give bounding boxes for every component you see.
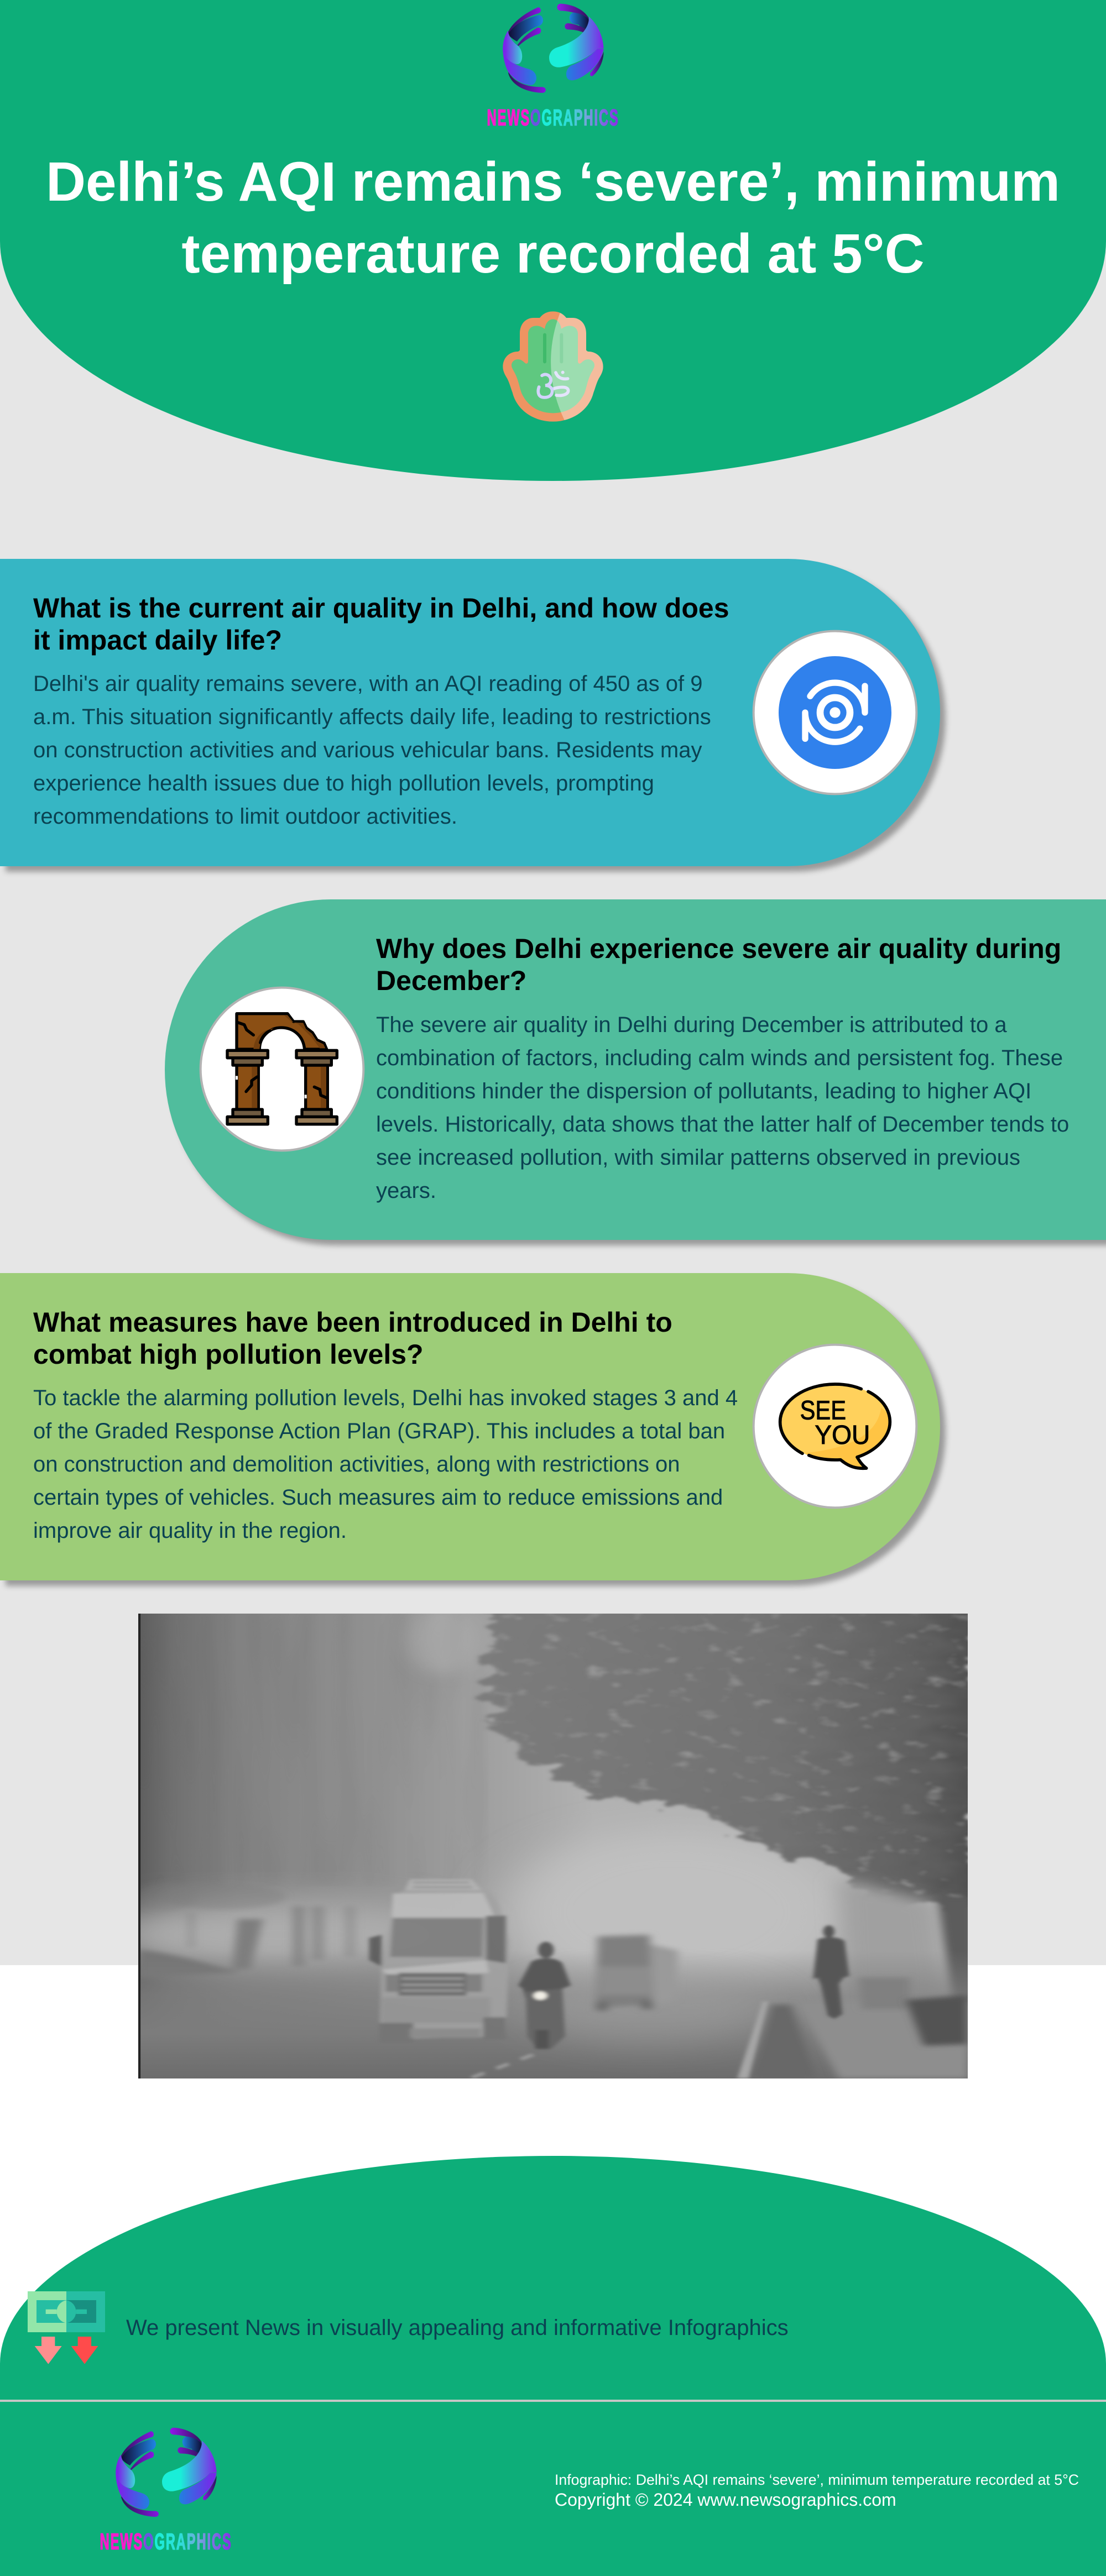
motorcyclist — [518, 1942, 571, 2049]
footer logo wordmark: NEWSOGRAPHICS — [100, 2530, 231, 2554]
text block: measures introduced: To tackle the alarming pollution levels, Delhi has invoked stages 3 and 4 — [33, 1386, 738, 1410]
text block: current air quality: Delhi's air quality remains severe, with an AQI reading of 450 as of 9 — [33, 672, 702, 696]
text block: current air quality: a.m. This situation significantly affects daily life, leading to restrictions — [33, 705, 711, 729]
heading: current air quality: it impact daily life? — [33, 625, 282, 656]
text block: why December: levels. Historically, data shows that the latter half of December tends to — [376, 1112, 1069, 1137]
text block: measures introduced: on construction and demolition activities, along with restrictions on — [33, 1452, 680, 1477]
footer copyright: Copyright © 2024 www.newsographics.com — [555, 2490, 896, 2510]
footer divider — [0, 2400, 1106, 2402]
grey page background — [0, 0, 1106, 1965]
van — [369, 1879, 509, 2043]
icon: hand with om — [503, 311, 603, 422]
logo wordmark: NEWSOGRAPHICS — [487, 106, 618, 130]
heading: current air quality — [33, 593, 729, 656]
text block: why December: combination of factors, including calm winds and persistent fog. These — [376, 1046, 1063, 1070]
text block: measures introduced: certain types of vehicles. Such measures aim to reduce emissions and — [33, 1485, 723, 1510]
distant roadside trees — [140, 1893, 356, 1974]
text block: current air quality — [33, 672, 711, 829]
footer banner — [0, 2156, 1106, 2576]
planters — [859, 1977, 910, 2009]
icon: see you speech bubble: YOU — [815, 1420, 870, 1450]
title: Delhi’s AQI remains ‘severe’, minimum — [46, 151, 1060, 213]
distant truck — [596, 1935, 678, 2011]
footer caption: Infographic: Delhi’s AQI remains ‘severe’, minimum temperature recorded at 5°C — [555, 2472, 1079, 2488]
icon: broken arch — [199, 986, 365, 1152]
text block: current air quality: on construction activities and various vehicular bans. Residents may — [33, 738, 702, 762]
heading: current air quality: What is the current air quality in Delhi, and how does — [33, 593, 729, 624]
heading: measures introduced: What measures have been introduced in Delhi to — [33, 1307, 672, 1338]
road markings — [759, 2002, 808, 2070]
text block: why December: years. — [376, 1179, 436, 1203]
footer logo — [0, 2424, 1106, 2557]
panel: measures introduced — [0, 1273, 940, 1580]
tagline: We present News in visually appealing and informative Infographics — [126, 2316, 789, 2340]
pavement — [808, 2012, 968, 2078]
text block: measures introduced: improve air quality in the region. — [33, 1519, 347, 1543]
tree trunk right — [938, 1897, 974, 2004]
panel: why December — [165, 899, 1106, 1240]
pedestrian — [813, 1925, 849, 2019]
heading: measures introduced — [33, 1306, 672, 1370]
road and ground — [140, 1959, 968, 2078]
header banner — [0, 0, 1106, 481]
icon: see you speech bubble — [752, 1343, 918, 1509]
heading: why December: December? — [376, 965, 526, 996]
icon: banknote with down arrows — [17, 2277, 127, 2371]
text block: current air quality: recommendations to limit outdoor activities. — [33, 804, 457, 829]
text block: why December: see increased pollution, with similar patterns observed in previous — [376, 1145, 1020, 1170]
distant right trees — [839, 1878, 946, 1995]
text block: why December — [376, 1013, 1069, 1203]
text block: measures introduced: of the Graded Response Action Plan (GRAP). This includes a total ban — [33, 1419, 725, 1443]
title — [46, 151, 1060, 285]
heading: measures introduced: combat high pollution levels? — [33, 1339, 424, 1370]
photo: foggy Delhi road — [138, 1614, 968, 2078]
icon: see you speech bubble: SEE — [800, 1395, 846, 1425]
text block: current air quality: experience health issues due to high pollution levels, prompting — [33, 771, 654, 795]
fog glow — [140, 1888, 392, 1977]
icon: blue air circulation — [752, 630, 918, 795]
text block: why December: conditions hinder the dispersion of pollutants, leading to higher AQI — [376, 1079, 1031, 1103]
heading: why December: Why does Delhi experience severe air quality during — [376, 933, 1061, 964]
title: temperature recorded at 5°C — [181, 223, 925, 285]
text block: why December: The severe air quality in Delhi during December is attributed to a — [376, 1013, 1007, 1037]
header logo — [487, 3, 618, 130]
panel: current air quality — [0, 559, 940, 866]
text block: measures introduced — [33, 1381, 738, 1547]
heading: why December — [376, 933, 1061, 996]
tree canopy — [488, 1598, 980, 1916]
misty streaks — [138, 1614, 488, 1887]
